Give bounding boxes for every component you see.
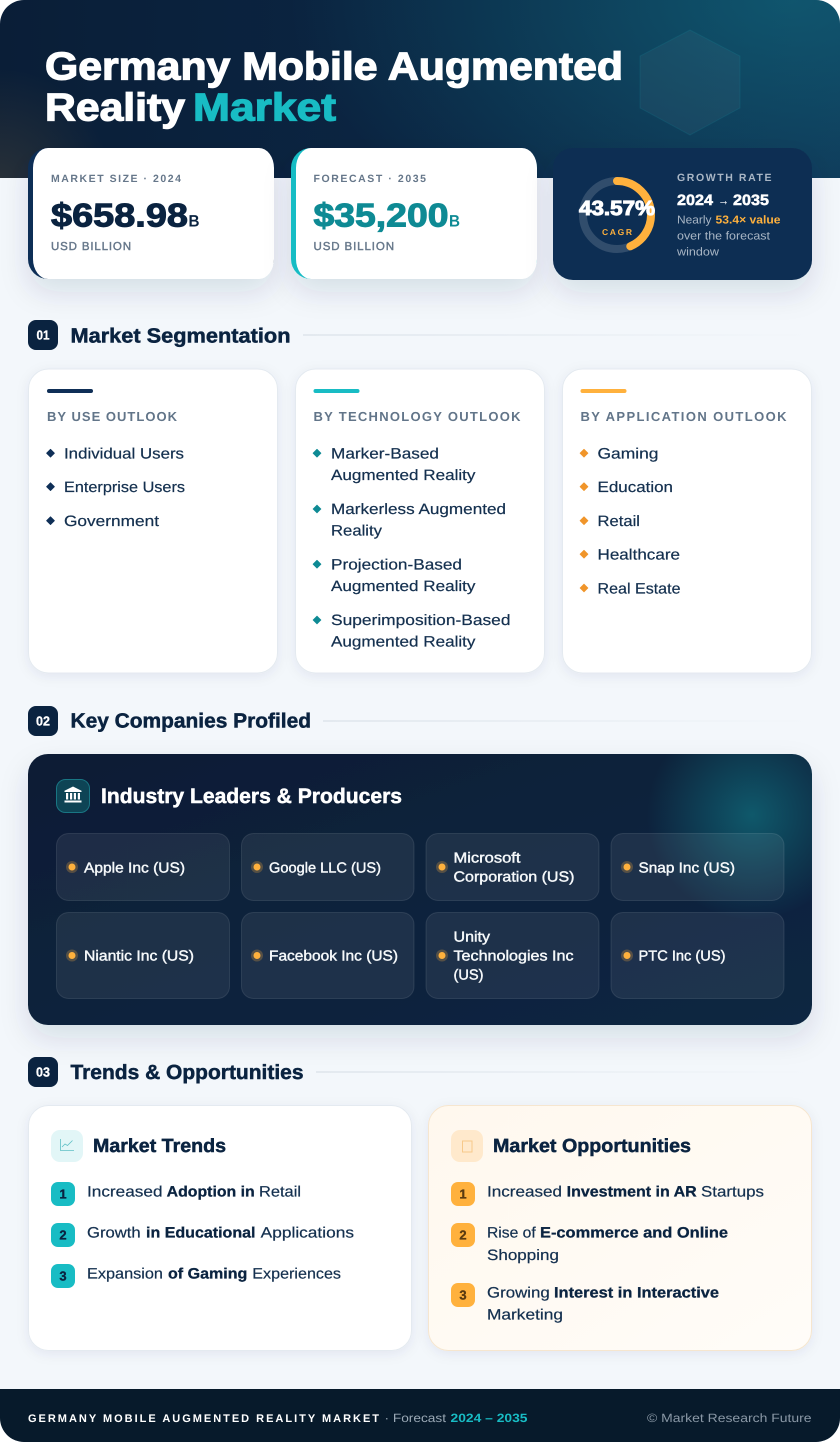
footer title	[28, 1411, 528, 1425]
company: Unity: Technologies Inc	[454, 948, 574, 964]
panel heading: Industry Leaders & Producers	[101, 785, 402, 808]
opportunity 2: Shopping	[487, 1247, 559, 1264]
section heading 01	[28, 320, 812, 350]
opportunity 1	[451, 1182, 764, 1206]
growth text: over the forecast	[677, 230, 771, 242]
panel: by application outlook	[562, 369, 812, 673]
list: Superimposition-Based	[331, 612, 510, 629]
section heading 03: Trends & Opportunities	[70, 1061, 304, 1084]
footer title: GERMANY MOBILE AUGMENTED REALITY MARKET	[28, 1413, 379, 1425]
growth text: →	[718, 192, 729, 208]
company: Facebook	[242, 912, 414, 998]
opportunity 2: E-commerce and Online	[540, 1224, 728, 1242]
value: $35,200	[314, 196, 448, 234]
trend 2: 2	[59, 1228, 67, 1242]
value: B	[188, 212, 200, 230]
company: Snap: Snap Inc (US)	[638, 860, 735, 876]
heading: BY USE OUTLOOK	[47, 409, 178, 424]
panel: by technology outlook	[296, 369, 544, 673]
copyright: © Market Research Future	[647, 1411, 812, 1425]
list: Augmented Reality	[331, 578, 476, 595]
opportunity 1: Investment in AR	[567, 1184, 697, 1200]
value: $658.98	[51, 196, 188, 234]
icon: placeholder box	[451, 1130, 483, 1162]
growth text: 53.4× value	[716, 214, 780, 226]
section heading 02	[28, 706, 812, 736]
growth text: window	[676, 246, 720, 258]
trend 2	[51, 1223, 354, 1247]
opportunity 3: 3	[459, 1288, 467, 1302]
trend 1: 1	[59, 1186, 67, 1202]
company: PTC: PTC Inc (US)	[638, 948, 726, 964]
trend 2: in Educational	[146, 1224, 256, 1242]
list: Individual Users	[64, 446, 184, 462]
trend 3: of Gaming	[168, 1266, 247, 1282]
growth text: 2024	[677, 192, 714, 209]
list: Augmented Reality	[331, 467, 476, 484]
heading: Market Opportunities	[493, 1136, 691, 1157]
title: Germany Mobile Augmented	[45, 46, 623, 88]
trend 3: Experiences	[252, 1266, 341, 1282]
company: Microsoft: Corporation (US)	[454, 870, 574, 886]
opportunity 3	[451, 1283, 719, 1324]
trend 1: Retail	[259, 1184, 301, 1200]
title: Reality	[45, 86, 185, 130]
company: Snap	[611, 834, 784, 900]
company: Apple: Apple Inc (US)	[84, 860, 185, 876]
footer	[0, 1389, 840, 1442]
list	[313, 446, 510, 650]
section heading 01: Market Segmentation	[70, 324, 290, 348]
decorative hexagon	[640, 30, 740, 135]
opportunity 1: 1	[459, 1186, 467, 1202]
list	[580, 446, 680, 598]
heading: BY APPLICATION OUTLOOK	[580, 409, 787, 424]
company: Unity: Unity	[454, 930, 491, 946]
opportunity 2: 2	[459, 1228, 467, 1242]
panel: market trends	[28, 1106, 412, 1350]
list: Gaming	[598, 446, 658, 462]
unit: USD BILLION	[314, 241, 394, 253]
trend 1: Increased	[87, 1184, 162, 1200]
opportunity 2: Rise of	[487, 1224, 537, 1242]
CAGR donut: 43.57%	[579, 197, 655, 220]
company: Google: Google LLC (US)	[269, 860, 381, 876]
trend 1: Adoption in	[167, 1184, 255, 1200]
header band	[0, 0, 840, 178]
section heading 03: 03	[36, 1064, 50, 1080]
stat card: market size 2024	[28, 148, 274, 279]
title	[45, 46, 623, 130]
list: Retail	[598, 513, 640, 530]
list: Projection-Based	[331, 556, 462, 574]
label: FORECAST · 2035	[314, 173, 426, 185]
trend 3	[51, 1264, 341, 1288]
accent bar	[314, 389, 360, 393]
section heading 02: 02	[36, 714, 50, 728]
trend 1	[51, 1182, 301, 1206]
section heading 03	[28, 1057, 812, 1087]
trend 2: Applications	[261, 1224, 354, 1242]
company: Niantic	[56, 912, 230, 998]
company: Microsoft	[426, 834, 599, 900]
company: Microsoft: Microsoft	[454, 850, 520, 866]
company: Unity	[426, 912, 599, 998]
trend 3: 3	[59, 1268, 67, 1284]
growth text: Nearly	[677, 214, 712, 226]
CAGR donut	[579, 181, 655, 249]
list: Marker-Based	[331, 446, 439, 462]
list: Education	[598, 479, 673, 496]
trend 3: Expansion	[87, 1266, 163, 1282]
icon: institution	[56, 780, 90, 812]
unit: USD BILLION	[51, 241, 131, 253]
icon: line chart	[51, 1130, 83, 1162]
company: PTC	[611, 912, 784, 998]
company: Niantic: Niantic Inc (US)	[84, 948, 194, 964]
label: MARKET SIZE · 2024	[51, 173, 181, 185]
list: Real Estate	[598, 580, 680, 598]
heading: Market Trends	[93, 1136, 226, 1157]
opportunity 3: Marketing	[487, 1306, 563, 1324]
section heading 02: Key Companies Profiled	[70, 710, 311, 732]
growth text: GROWTH RATE	[677, 172, 772, 184]
footer title: · Forecast	[384, 1411, 447, 1425]
opportunity 1: Increased	[487, 1184, 562, 1200]
accent bar	[47, 389, 93, 393]
heading: BY TECHNOLOGY OUTLOOK	[314, 409, 521, 424]
stat card: growth rate	[553, 148, 812, 280]
panel: key companies	[28, 754, 812, 1025]
trend 2: Growth	[87, 1224, 141, 1242]
list: Markerless Augmented	[331, 501, 506, 518]
opportunity 1: Startups	[701, 1184, 764, 1200]
company: Unity: (US)	[454, 968, 484, 984]
growth text: 2035	[733, 192, 769, 209]
company: Facebook: Facebook Inc (US)	[269, 948, 398, 964]
panel: market opportunities	[428, 1106, 812, 1350]
footer title: 2024 – 2035	[450, 1411, 528, 1425]
stat card: forecast 2035	[291, 148, 537, 279]
accent bar	[580, 389, 626, 393]
list: Augmented Reality	[331, 634, 476, 650]
value: B	[449, 212, 460, 230]
opportunity 3: Interest in Interactive	[554, 1284, 719, 1302]
opportunity 3: Growing	[487, 1284, 550, 1302]
list: Enterprise Users	[64, 479, 185, 496]
growth text	[676, 172, 780, 258]
list: Reality	[331, 522, 383, 540]
section heading 01: 01	[36, 328, 50, 342]
CAGR donut: CAGR	[602, 227, 632, 237]
list: Healthcare	[598, 546, 680, 564]
list: Government	[64, 513, 160, 530]
opportunity 2	[451, 1223, 728, 1264]
title: Market	[193, 86, 336, 130]
list	[47, 446, 185, 530]
panel: by use outlook	[28, 369, 278, 673]
company: Apple	[56, 834, 230, 900]
company: Google	[242, 834, 414, 900]
